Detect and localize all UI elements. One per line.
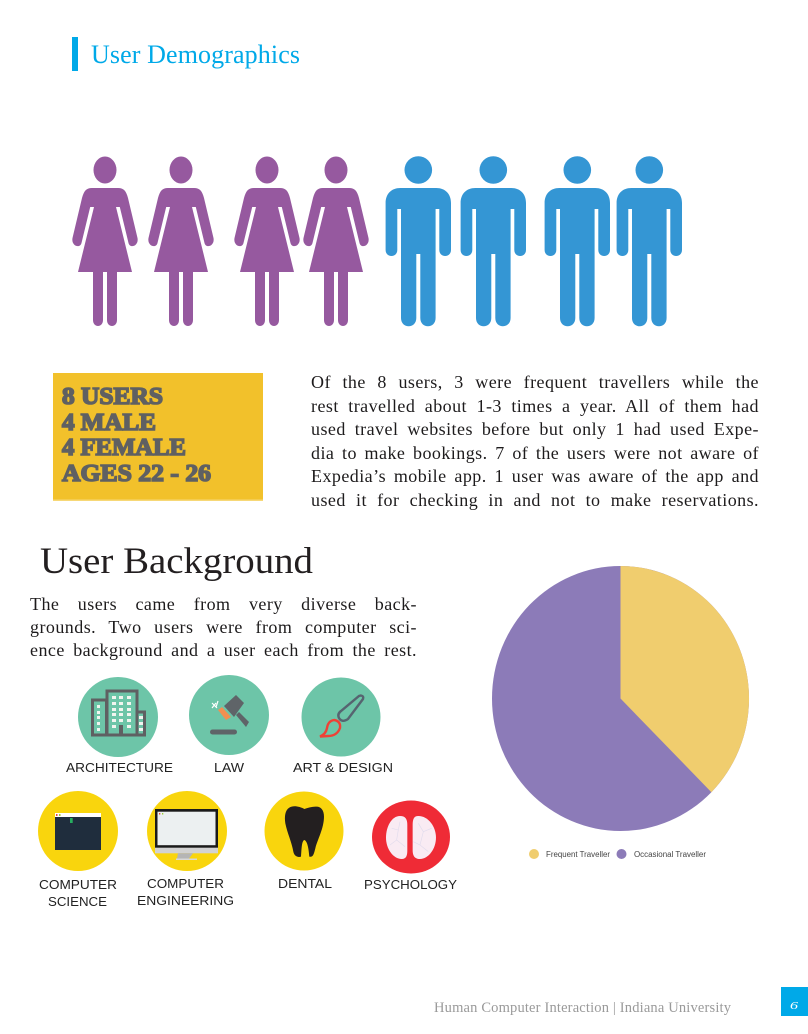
label: computer science: SCIENCE: [48, 894, 107, 909]
icon: man 2: [461, 156, 526, 326]
icon: man 3: [545, 156, 610, 326]
label: dental: DENTAL: [278, 876, 332, 891]
footer text: Human Computer Interaction | Indiana University: [434, 1000, 732, 1016]
label: computer science: [39, 877, 117, 909]
text block: user travel summary: used travel websites before but only 1 had used Expe-: [311, 419, 759, 439]
label: computer engineering: [137, 876, 234, 908]
page number: 6: [790, 1000, 799, 1012]
heading: User Demographics: User Demographics: [91, 40, 300, 69]
label: computer science: COMPUTER: [39, 877, 117, 892]
label: architecture: ARCHITECTURE: [66, 760, 173, 775]
label: law: LAW: [214, 760, 245, 775]
chart legend: Frequent Traveller: [546, 850, 610, 859]
icon: woman 3: [234, 156, 300, 326]
icon: law gavel: [189, 675, 269, 755]
text block: user background description: The users came from very diverse back-: [30, 594, 417, 614]
text block: user background description: ence background and a user each from the rest.: [30, 640, 417, 660]
icon: woman 4: [303, 156, 369, 326]
callout: user summary: 8 USERS: [62, 384, 163, 410]
text block: user travel summary: dia to make bookings. 7 of the users were not aware of: [311, 443, 759, 463]
icon: dental tooth: [264, 792, 344, 870]
icon: woman 2: [148, 156, 214, 326]
heading: User Background: User Background: [40, 541, 314, 582]
icon: architecture: [78, 677, 158, 757]
icon: man 1: [386, 156, 451, 326]
callout: user summary: [53, 373, 263, 501]
callout: user summary: 4 MALE: [62, 410, 156, 436]
page number: [781, 987, 808, 1016]
icon: art and design brush: [302, 678, 380, 756]
text block: user travel summary: used it for checking in and not to make reservations.: [311, 490, 759, 510]
label: art and design: ART & DESIGN: [293, 760, 393, 775]
callout: user summary: AGES 22 - 26: [62, 461, 211, 487]
icon: psychology brain: [372, 800, 450, 874]
text block: user background description: [30, 594, 417, 660]
text block: user travel summary: Expedia’s mobile app. 1 user was aware of the app and: [311, 466, 759, 486]
chart legend: Occasional Traveller: [634, 850, 706, 859]
pie chart: traveller frequency: [492, 566, 749, 831]
icon: man 4: [617, 156, 682, 326]
chart legend: [529, 849, 706, 859]
icon: woman 1: [72, 156, 138, 326]
label: psychology: PSYCHOLOGY: [364, 877, 457, 892]
text block: user background description: grounds. Two users were from computer sci-: [30, 617, 417, 637]
icon: computer science: [38, 791, 118, 871]
people pictogram: 4 women and 4 men: [72, 156, 682, 326]
text block: user travel summary: rest travelled about 1-3 times a year. All of them had: [311, 396, 759, 416]
callout: user summary: 4 FEMALE: [62, 435, 186, 461]
label: computer engineering: COMPUTER: [147, 876, 224, 891]
text block: user travel summary: [311, 372, 759, 510]
icon: computer engineering: [147, 791, 227, 871]
label: computer engineering: ENGINEERING: [137, 893, 234, 908]
text block: user travel summary: Of the 8 users, 3 were frequent travellers while the: [311, 372, 759, 392]
